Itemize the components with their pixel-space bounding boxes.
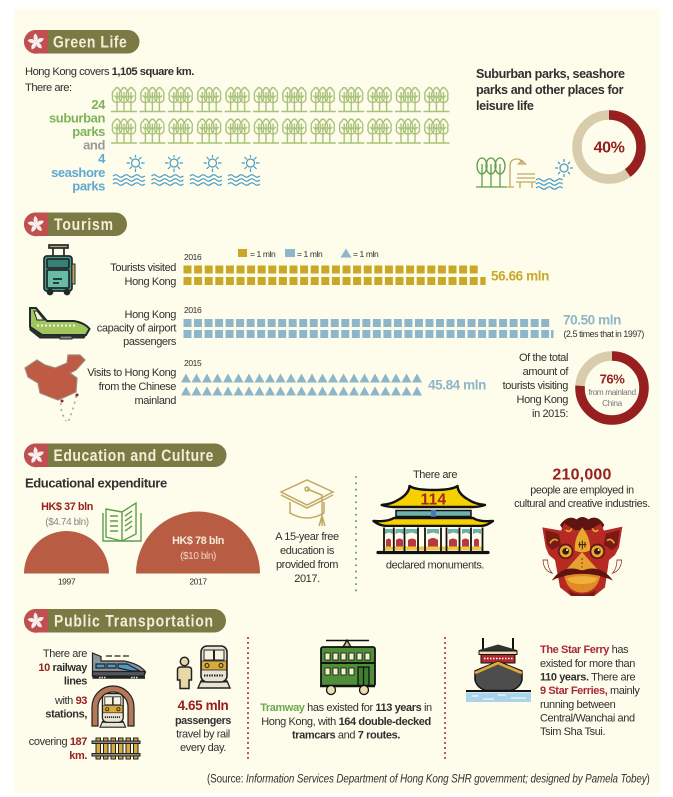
labels: tourism rows: Hong Kong	[125, 276, 176, 288]
map: China	[25, 355, 85, 422]
icon: graduation cap	[281, 480, 333, 526]
section: Tourism	[24, 212, 644, 422]
pictogram: visits from the mainland	[181, 374, 422, 396]
text: railway lines: with 93	[54, 695, 87, 707]
label: parks count: suburban	[49, 110, 105, 126]
labels: years: 2016	[184, 305, 202, 315]
text: free education: A 15-year free	[275, 531, 339, 543]
text: daily rail passengers: 4.65 mln	[178, 698, 229, 713]
text: tramway: Tramway has existed for 113 years in	[260, 702, 432, 714]
text: free education: education is	[280, 545, 335, 557]
icon: tram	[320, 640, 375, 694]
icon: Star Ferry	[466, 638, 531, 702]
text: creative employment	[514, 466, 650, 510]
donut chart: 76%: 76%	[600, 372, 625, 386]
donut chart: 76%	[580, 356, 644, 420]
text: total tourists: amount of	[523, 366, 569, 378]
legend: = 1 mln	[250, 249, 276, 259]
value: 70.50 mln: (2.5 times that in 1997)	[564, 329, 644, 339]
text: daily rail passengers	[175, 698, 231, 754]
heading: Tourism	[24, 212, 127, 236]
section: Public Transportation	[24, 609, 640, 762]
text: leisure places heading: Suburban parks, seashore	[476, 67, 625, 81]
icon: airplane	[30, 308, 90, 339]
semicircle: 2017	[136, 512, 260, 574]
icon: suitcase	[44, 245, 75, 294]
heading: Education and Culture: Education and Culture	[54, 447, 214, 465]
text: tramway: Hong Kong, with 164 double-decked	[261, 716, 431, 728]
labels: tourism rows: capacity of airport	[97, 322, 176, 334]
text: Star Ferry: running between	[540, 699, 616, 711]
text: railway lines	[29, 648, 88, 762]
text: railway lines: km.	[69, 750, 87, 762]
text: creative employment: 210,000	[552, 466, 612, 484]
text: there are: There are:	[25, 82, 72, 94]
value: 45.84 mln: 45.84 mln	[428, 378, 486, 392]
text: creative employment: people are employed in	[530, 484, 634, 496]
labels: tourism rows: Visits to Hong Kong	[87, 367, 176, 379]
value: 56.66 mln: 56.66 mln	[491, 268, 549, 284]
section: Education and Culture	[24, 444, 650, 596]
text: tramway: tramcars and 7 routes.	[292, 730, 400, 742]
labels: tourism rows: mainland	[135, 395, 176, 407]
semicircle: 2017: HK$ 78 bln	[172, 535, 224, 547]
text: creative employment: cultural and creative industries.	[514, 498, 650, 510]
label: parks count: parks	[72, 124, 105, 139]
source credit: (Source: Information Services Department of Hong Kong SHR government; designed by Pamela Tobey)	[207, 773, 650, 786]
text: area of Hong Kong: Hong Kong covers 1,105 square km.	[25, 66, 194, 78]
heading: Green Life: Green Life	[53, 33, 127, 52]
text: Star Ferry	[540, 644, 640, 738]
label: parks count: parks	[72, 178, 105, 194]
axis labels: years	[58, 576, 207, 586]
text: railway lines: covering 187	[29, 736, 87, 748]
icon: train front	[198, 646, 230, 688]
semicircle: 1997	[24, 531, 109, 574]
label: parks count: 24	[91, 97, 106, 112]
text: railway lines: lines	[64, 676, 87, 688]
label: parks count: and	[83, 138, 105, 152]
value: 1997 expenditure: HK$ 37 bln	[41, 501, 93, 513]
label: parks count: 4	[98, 151, 106, 166]
text: Star Ferry: 9 Star Ferries, mainly	[540, 685, 640, 697]
text: railway lines: There are	[43, 648, 87, 660]
donut chart: 40%	[577, 115, 641, 179]
icon: tunnel and train	[92, 686, 134, 727]
icon: open book	[103, 503, 141, 541]
heading: Green Life	[24, 30, 140, 54]
text: free education	[275, 531, 339, 585]
text: Star Ferry: 110 years. There are	[540, 672, 635, 684]
label: parks count: seashore	[51, 165, 105, 180]
labels: tourism rows	[87, 262, 177, 407]
legend: = 1 mln	[297, 249, 323, 259]
labels: tourism rows: Tourists visited	[110, 262, 176, 274]
subheading: Educational expenditure: Educational expenditure	[25, 476, 167, 490]
axis labels: years: 2017	[189, 576, 207, 586]
labels: years	[184, 252, 202, 368]
pictogram: 4 seashore parks	[113, 155, 260, 185]
value: 70.50 mln	[563, 312, 644, 339]
text: daily rail passengers: travel by rail	[176, 728, 230, 740]
icon: temple with 114: 114	[421, 492, 447, 508]
label: parks count	[49, 97, 106, 194]
icon: park, lamp, bench and sea	[476, 158, 573, 189]
labels: tourism rows: passengers	[123, 336, 177, 348]
value: 70.50 mln: 70.50 mln	[563, 312, 621, 328]
icon: temple with 114	[374, 486, 493, 552]
text: Star Ferry: Central/Wanchai and	[540, 712, 635, 724]
icon: high-speed train	[92, 653, 146, 678]
pictogram: airport capacity	[184, 319, 554, 338]
icon: railway track	[92, 738, 140, 759]
section: Green Life	[24, 30, 641, 194]
donut chart: 76%: from mainland	[588, 387, 636, 397]
labels: tourism rows: Hong Kong	[125, 309, 176, 321]
legend	[238, 248, 379, 259]
labels: years: 2016	[184, 252, 202, 262]
text: railway lines: stations,	[45, 708, 87, 720]
text: declared monuments: declared monuments.	[386, 560, 484, 572]
text: daily rail passengers: every day.	[180, 742, 226, 754]
text: Star Ferry: existed for more than	[540, 658, 635, 670]
value: 1997 expenditure: ($4.74 bln)	[45, 517, 89, 528]
icon: passenger	[178, 657, 192, 688]
value: 1997 expenditure	[41, 501, 93, 528]
text: leisure places heading: parks and other places for	[476, 83, 624, 97]
text: there are: There are	[413, 469, 457, 481]
text: leisure places heading	[476, 67, 625, 113]
text: free education: provided from	[276, 559, 338, 571]
text: daily rail passengers: passengers	[175, 715, 231, 727]
heading: Education and Culture	[24, 444, 226, 467]
text: free education: 2017.	[294, 573, 320, 585]
text: leisure places heading: leisure life	[476, 99, 534, 113]
text: railway lines: 10 railway	[38, 662, 88, 674]
donut chart: 40%: 40%	[594, 140, 625, 156]
text: Star Ferry: The Star Ferry has	[540, 644, 629, 656]
text: Star Ferry: Tsim Sha Tsui.	[540, 726, 605, 738]
heading: Public Transportation	[24, 609, 226, 633]
heading: Public Transportation: Public Transportation	[54, 612, 213, 631]
text: tramway	[260, 702, 432, 742]
icon: lion mask	[542, 517, 622, 596]
pictogram: 24 suburban parks trees	[111, 88, 449, 143]
text: total tourists: Of the total	[519, 352, 568, 364]
text: total tourists	[503, 352, 569, 420]
semicircle: 2017: ($10 bln)	[180, 551, 216, 562]
labels: tourism rows: from the Chinese	[99, 381, 176, 393]
donut chart: 76%: China	[602, 398, 623, 408]
text: total tourists: Hong Kong	[517, 394, 568, 406]
heading: Tourism: Tourism	[54, 216, 113, 234]
axis labels: years: 1997	[58, 576, 76, 586]
legend: = 1 mln	[353, 249, 379, 259]
pictogram: tourists visited	[184, 266, 486, 285]
text: total tourists: in 2015:	[532, 408, 568, 420]
text: total tourists: tourists visiting	[503, 380, 568, 392]
labels: years: 2015	[184, 358, 202, 368]
